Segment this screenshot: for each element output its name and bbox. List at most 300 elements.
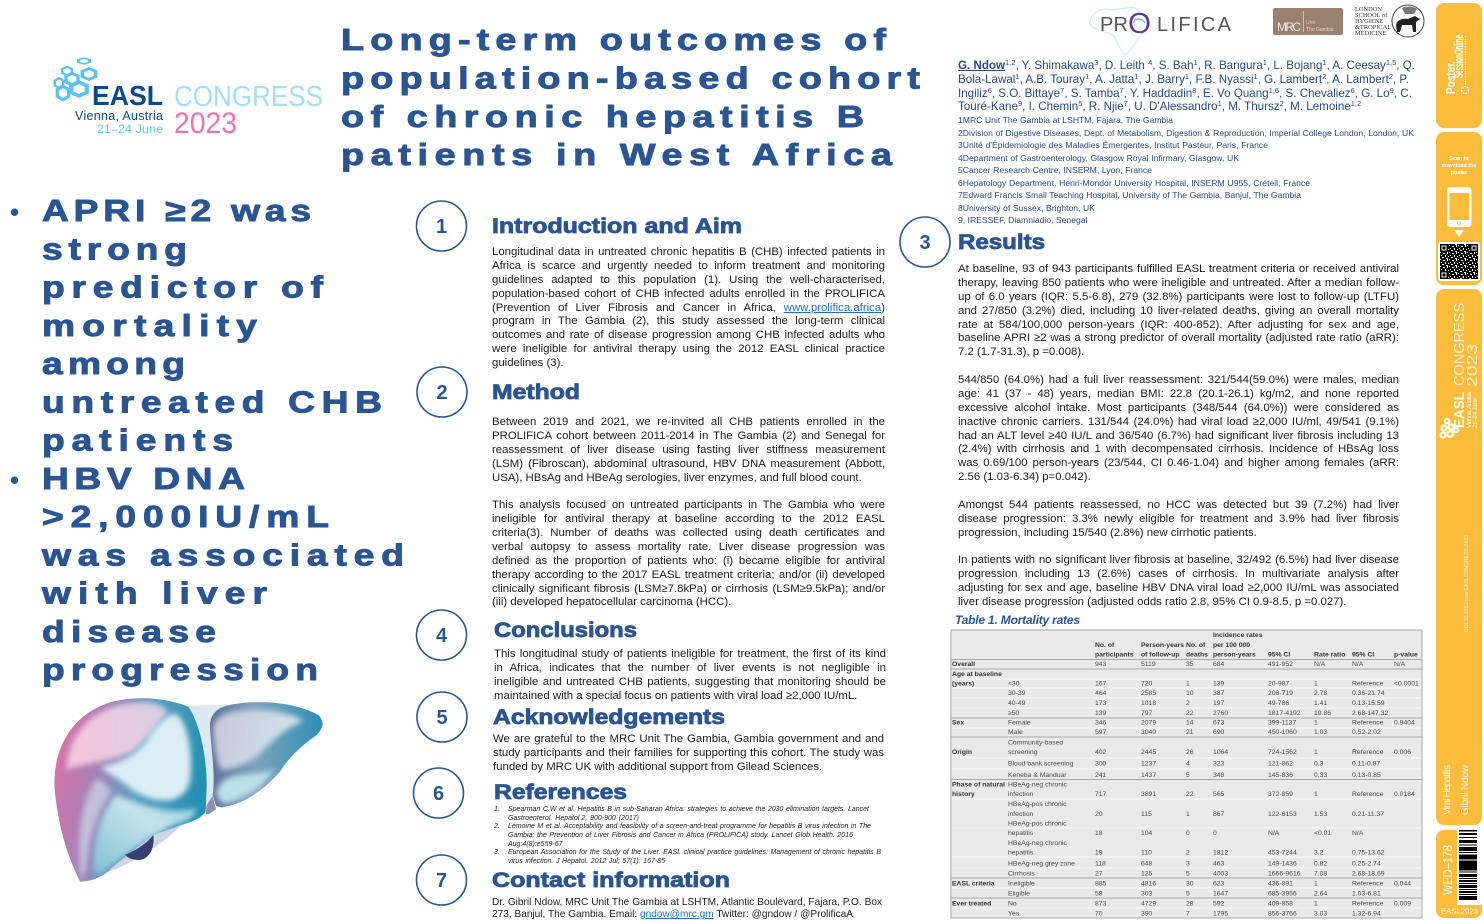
table: mortality rates: Female: [1008, 720, 1031, 726]
table: mortality rates: 104: [1141, 830, 1153, 837]
table: mortality rates: Phase of natural: [952, 782, 1005, 788]
key messages: >2,000IU/mL: [42, 500, 329, 534]
table: mortality rates: 30-39: [1008, 690, 1026, 697]
key messages: among: [42, 347, 185, 381]
table: mortality rates: 390: [1141, 910, 1153, 918]
table: mortality rates: hepatitis: [1008, 830, 1034, 837]
table: mortality rates: <0.0001: [1394, 680, 1419, 688]
logo: LSHTM: LONDON: [1355, 6, 1382, 13]
table: mortality rates: deaths: [1186, 652, 1208, 658]
table: mortality rates: 139: [1095, 710, 1107, 717]
affiliations: 2Division of Digestive Diseases, Dept. of Metabolism, Digestion & Reproduction, Imperial College London, London, UK: [958, 128, 1414, 138]
table: mortality rates: 1817-4192: [1268, 710, 1301, 717]
table: mortality rates: N/A: [1352, 830, 1364, 837]
table: mortality rates: infection: [1008, 811, 1034, 818]
table: mortality rates: 4: [1186, 760, 1190, 768]
table: mortality rates: HBeAg-pos chronic: [1008, 820, 1067, 828]
illustration: liver: [54, 698, 323, 882]
text: results: 544/850 (64.0%) had a full liver reassessment: 321/544(59.0%) were males, median: [958, 374, 1399, 386]
affiliations: 5Cancer Research Centre, INSERM, Lyon, France: [958, 165, 1152, 175]
table: mortality rates: of follow-up: [1141, 652, 1180, 658]
table: mortality rates: 58: [1095, 890, 1103, 898]
table: mortality rates: 1.32-6.94: [1352, 910, 1381, 918]
key messages: APRI ≥2 was: [42, 194, 311, 228]
text: references: Aug;4(8):e559-67: [508, 841, 562, 848]
key messages: patients: [42, 424, 233, 458]
text: introduction and aim: Africa is scarce and urgently needed to inform treatment and monitoring: [492, 260, 885, 272]
table: mortality rates: Ineligible: [1008, 880, 1035, 888]
text: references: virus infection. J Hepatol. 2012 Jul; 57(1): 167-85: [508, 858, 665, 865]
text: references: Gastroenterol. Hepatol.2, 900-900 (2017): [508, 815, 639, 822]
text: results: 2.56 (1.03-6.34) p=0.042).: [958, 471, 1091, 483]
table: mortality rates: 1: [1186, 680, 1190, 688]
table: mortality rates: 1237: [1141, 760, 1156, 768]
table: mortality rates: 717: [1095, 791, 1107, 798]
heading: Contact information: Contact information: [492, 869, 730, 892]
table: mortality rates: 1795: [1213, 910, 1228, 918]
logo: EASL Congress 2023: 2023: [174, 107, 237, 140]
table: mortality rates: <30: [1008, 680, 1020, 688]
section number 4: [416, 610, 466, 660]
table: mortality rates: <0.01: [1314, 830, 1331, 837]
text: method: reassessment of liver disease using fasting liver stiffness measurement: [492, 444, 885, 456]
table: mortality rates: 4816: [1141, 880, 1156, 888]
table: mortality rates: Reference: [1352, 680, 1384, 688]
table: mortality rates: 1: [1314, 749, 1318, 756]
table: mortality rates: 3.2: [1314, 850, 1324, 856]
side panel: poster number and barcode: WED–178: [1440, 845, 1455, 895]
table: mortality rates: 648: [1141, 860, 1153, 868]
table: mortality rates: 0.36-21.74: [1352, 690, 1385, 697]
table: mortality rates: 0.25-2.74: [1352, 860, 1381, 868]
table: mortality rates: 2585: [1141, 690, 1156, 697]
text: results: At baseline, 93 of 943 participants fulfilled EASL treatment criteria or received antiviral: [958, 263, 1399, 275]
text: 3.: [494, 849, 500, 856]
section number 7: 7: [436, 870, 447, 892]
text: results: up of 6.0 years (IQR: 5.5-6.8), 279 (32.8%) participants were lost to follow-up (LTFU): [958, 291, 1399, 303]
text: contact information: Dr. Gibril Ndow, MRC Unit The Gambia at LSHTM, Atlantic Boulevard, Fajara, P.O. Box: [492, 896, 882, 908]
section number 4: 4: [436, 625, 448, 647]
title: [341, 23, 921, 172]
title: Long-term outcomes of: [341, 23, 887, 57]
text: acknowledgements: funded by MRC UK with additional support from Gilead Sciences.: [493, 761, 822, 773]
table: mortality rates: 20: [1095, 811, 1103, 818]
text: references: Lemoine M et al. Acceptability and feasibility of a screen-and-treat programme for hepatitis B virus infection in The: [508, 823, 871, 830]
table: mortality rates: 0: [1186, 830, 1190, 837]
table: mortality rates: 208-719: [1268, 690, 1293, 697]
table: mortality rates: 22: [1186, 710, 1194, 717]
table: mortality rates: 20-987: [1268, 680, 1289, 688]
table: mortality rates: 856-3766: [1268, 910, 1297, 918]
text: method: (LSM) (Fibroscan), abdominal ultrasound, HBV DNA measurement (Abbott,: [492, 458, 885, 470]
table: mortality rates: 2: [1186, 850, 1190, 856]
text: acknowledgements: study participants and their families for supporting this cohort. The study was: [493, 747, 884, 759]
heading: Acknowledgements: Acknowledgements: [493, 706, 725, 729]
text: conclusions: in Africa, indicates that the number of liver events is not negligible in: [494, 662, 886, 674]
table: mortality rates: 491-952: [1268, 661, 1293, 668]
affiliations: [958, 115, 1414, 225]
key messages: with liver: [41, 577, 267, 611]
section number 3: [900, 217, 950, 267]
text: results: baseline APRI ≥2 was a strong predictor of overall mortality (adjusted rate ratio (aRR):: [958, 332, 1399, 344]
table: mortality rates: hepatitis: [1008, 850, 1034, 856]
table: mortality rates: HBeAg-neg chronic: [1008, 840, 1068, 847]
table: mortality rates: 300: [1095, 760, 1107, 768]
key messages: was associated: [41, 538, 404, 572]
text: method: therapy according to the 2017 EASL treatment criteria; and/or (ii) developed: [492, 569, 885, 581]
logo: LSHTM: HYGIENE: [1355, 18, 1383, 25]
table: mortality rates: 27: [1095, 870, 1103, 878]
table: mortality rates: HBeAg-neg grey zone: [1008, 860, 1075, 868]
table: mortality rates: 26: [1186, 749, 1194, 756]
text: method: Between 2019 and 2021, we re-invited all CHB patients enrolled in the: [492, 416, 885, 428]
side panel: EASL Congress session details: Gibril Ndow: [1460, 764, 1471, 815]
authors: Bola-Lawal1, A.B. Touray1, A. Jatta1, J. Barry1, F.B. Nyassi1, G. Lambert2, A. Lambert2, P.: [958, 72, 1409, 86]
text: references: Spearman C.W et al. Hepatitis B in sub-Saharan Africa: strategies to achieve the 2030 elimination targets. Lancet: [508, 806, 869, 813]
affiliations: 1MRC Unit The Gambia at LSHTM, Fajara, The Gambia: [958, 115, 1173, 125]
table: mortality rates: Cirrhosis: [1008, 870, 1035, 878]
affiliations: 9, IRESSEF, Diamniadio, Senegal: [958, 215, 1087, 225]
table: mortality rates: Age at baseline: [952, 671, 1002, 678]
table: mortality rates: 597: [1095, 729, 1107, 736]
table: mortality rates: Male: [1008, 729, 1023, 736]
table: mortality rates: 464: [1095, 690, 1107, 697]
table: mortality rates: 2: [1186, 700, 1190, 707]
table: mortality rates: Incidence rates: [1213, 632, 1263, 639]
table: mortality rates: 387: [1213, 690, 1225, 697]
table: mortality rates: 867: [1213, 811, 1225, 818]
table: mortality rates: 2.64: [1314, 890, 1327, 898]
affiliations: 7Edward Francis Small Teaching Hospital, University of The Gambia, Banjul, The Gambia: [958, 190, 1301, 200]
authors: Touré-Kane9, I. Chemin5, R. Njie7, U. D'Alessandro1, M. Thursz2, M. Lemoine1,2: [958, 99, 1361, 113]
side panel: EASL Congress session details: EASL: [1451, 392, 1468, 428]
table: mortality rates: Ever treated: [952, 900, 991, 908]
table: mortality rates: 0.044: [1394, 880, 1411, 888]
table: mortality rates: 453-7244: [1268, 850, 1297, 856]
side panel: Poster Session Online: [1436, 3, 1482, 128]
table: mortality rates: 1: [1314, 880, 1318, 888]
side panel: scan to download: download the: [1442, 163, 1476, 169]
table: mortality rates: 19.86: [1314, 710, 1331, 717]
heading: References: References: [494, 781, 627, 804]
text: results: and 27/850 (3.2%) died, including 10 liver-related deaths, giving an overall mortality: [958, 305, 1399, 317]
table: mortality rates: 1: [1314, 720, 1318, 726]
table: mortality rates: 409-858: [1268, 900, 1293, 908]
table: mortality rates: N/A: [1352, 661, 1364, 668]
heading: Introduction and Aim: Introduction and Aim: [492, 215, 742, 238]
text: method: defined as the proportion of patients who: (i) became eligible for antiviral: [492, 555, 885, 567]
table: mortality rates: N/A: [1314, 661, 1326, 668]
table: mortality rates: 5119: [1141, 661, 1156, 668]
authors: G. Ndow1,2, Y. Shimakawa3, D. Leith 4, S. Bah1, R. Bangura1, L. Bojang1, A. Ceesay1,5, Q.: [958, 58, 1415, 72]
table: mortality rates: 5: [1186, 870, 1190, 878]
side panel: EASL Congress session details: 21–24 June: [1473, 397, 1479, 428]
table: mortality rates: 7.08: [1314, 870, 1327, 878]
logo: EASL Congress 2023: Vienna, Austria: [75, 109, 163, 123]
side panel: EASL Congress session details: 2023: [1464, 344, 1481, 387]
text: results: liver disease progression (adjusted odds ratio 2.8, 95% CI 0.9-8.5, p =0.027).: [958, 596, 1346, 608]
logo: LSHTM: MEDICINE: [1355, 30, 1386, 37]
section number 6: 6: [433, 783, 444, 805]
table: mortality rates: 3: [1186, 860, 1190, 868]
table: mortality rates: 1: [1314, 900, 1318, 908]
logo: MRC Unit The Gambia: [1273, 8, 1343, 35]
table: mortality rates: 943: [1095, 661, 1107, 668]
section number 2: [417, 367, 467, 417]
table: mortality rates: Keneba & Manduar: [1008, 772, 1067, 779]
table: mortality rates: 372-859: [1268, 791, 1293, 798]
side panel: scan to download: Scan to: [1449, 156, 1469, 162]
text: 2.: [494, 823, 500, 830]
section number 5: [417, 692, 467, 742]
key messages: progression: [42, 653, 318, 687]
text: method: USA), HBsAg and HBeAg serologies, liver enzymes, and full blood count.: [492, 472, 862, 484]
logo: MRC Unit The Gambia: Unit: [1306, 20, 1316, 26]
table: mortality rates: 110: [1141, 850, 1152, 856]
side panel: EASL Congress session details: DOI:10.3252/pow.EASLCONGRESS.2023: [1464, 535, 1470, 632]
table: mortality rates: 1.41: [1314, 700, 1327, 707]
table: mortality rates: 450-1060: [1268, 729, 1297, 736]
table: mortality rates: 323: [1213, 760, 1225, 768]
QR code: [1438, 242, 1480, 281]
logo: EASL Congress 2023: EASL: [92, 80, 163, 111]
table: mortality rates: 125: [1141, 870, 1153, 878]
key messages: predictor of: [42, 271, 324, 305]
table: mortality rates: 0.9404: [1394, 720, 1415, 726]
table: mortality rates: 565: [1213, 791, 1225, 798]
table: mortality rates: 28: [1186, 900, 1194, 908]
table: mortality rates: per 100 000: [1213, 642, 1250, 649]
side panel: Poster Session Online: Poster: [1443, 63, 1458, 94]
table: mortality rates: Reference: [1352, 720, 1384, 726]
table: mortality rates: 1666-9616: [1268, 870, 1301, 878]
table: mortality rates: 40-49: [1008, 700, 1026, 707]
table: mortality rates: 592: [1213, 900, 1225, 908]
table: mortality rates: 873: [1095, 900, 1107, 908]
authors: [958, 58, 1415, 113]
table: mortality rates: No. of: [1186, 642, 1206, 649]
side panel: poster number and barcode: [1436, 830, 1482, 918]
text: method: criteria(3). Number of deaths was collected using death certificates and: [492, 527, 885, 539]
text: results: Amongst 544 patients reassessed, no HCC was detected but 39 (7.2%) had liver: [958, 499, 1399, 511]
text: results: had an ALT level ≥40 IU/L and 36/540 (6.7%) had significant liver fibrosis including 13: [958, 430, 1399, 442]
table: mortality rates: Blood bank screening: [1008, 760, 1074, 768]
table: mortality rates: 1: [1186, 811, 1190, 818]
table: mortality rates: Reference: [1352, 900, 1384, 908]
section number 3: 3: [919, 232, 931, 254]
table: mortality rates: Yes: [1008, 910, 1020, 918]
table: mortality rates: participants: [1095, 652, 1134, 658]
text: results: progression, including 15/540 (2.8%) new cirrhotic patients.: [958, 527, 1257, 539]
text: results: age: 41 (37 - 48) years, median BMI: 22.8 (20.1-26.1) kg/m2, and none reported: [958, 388, 1399, 400]
key messages: HBV DNA: [42, 462, 245, 496]
icon: phone: [1447, 187, 1472, 227]
text: conclusions: ineligible and untreated CHB patients, suggesting that monitoring should be: [494, 676, 886, 688]
table: mortality rates: 2079: [1141, 720, 1156, 726]
table: mortality rates: 0.13-15.59: [1352, 700, 1385, 707]
title: population-based cohort: [341, 62, 921, 96]
table: mortality rates: Person-years: [1141, 642, 1184, 649]
table: mortality rates: screening: [1008, 749, 1038, 756]
text: results: inactive chronic carriers. 131/544 (24.0%) had viral load ≥2,000 IU/ml, 49/541 (9.1%): [958, 416, 1399, 428]
text: introduction and aim: Longitudinal data in untreated chronic hepatitis B (CHB) infected patients in: [492, 246, 885, 258]
table: mortality rates: 623: [1213, 880, 1225, 888]
key messages: strong: [42, 232, 187, 266]
table: mortality rates: 122-6153: [1268, 811, 1297, 818]
text: acknowledgements: [493, 733, 884, 773]
table: mortality rates: 95% CI: [1352, 652, 1374, 658]
table: mortality rates: Community-based: [1008, 740, 1063, 746]
table: mortality rates: 18: [1095, 830, 1103, 837]
table: mortality rates: 797: [1141, 710, 1153, 717]
table: mortality rates: 303: [1141, 890, 1153, 898]
side panel: EASL Congress session details: CONGRESS: [1451, 303, 1468, 386]
table: mortality rates: 95% CI: [1268, 652, 1290, 658]
heading: Results: Results: [958, 230, 1045, 254]
table: mortality rates: 0.006: [1394, 749, 1411, 756]
heading: Method: Method: [492, 381, 580, 404]
key messages: •: [10, 465, 19, 495]
text: acknowledgements: We are grateful to the MRC Unit The Gambia, Gambia government and and: [493, 733, 884, 745]
table: mortality rates: 167: [1095, 680, 1107, 688]
table: mortality rates: p-value: [1394, 652, 1418, 658]
logo: PROLIFICA: O: [1128, 8, 1151, 40]
text: references: [494, 806, 881, 865]
table: mortality rates: 1812: [1213, 850, 1228, 856]
table: mortality rates: person-years: [1213, 652, 1256, 658]
icon: arrow down: [1454, 230, 1464, 237]
text: results: disease progression: 3.3% newly eligible for treatment and 3.9% had liver fibrosis: [958, 513, 1399, 525]
table: mortality rates: 346: [1095, 720, 1107, 726]
text: introduction and aim: guidelines adapted to this population (1). Using the well-characterised,: [492, 274, 885, 286]
table title: Table 1. Mortality rates: [955, 613, 1080, 627]
logo: PROLIFICA: LIFICA: [1157, 14, 1232, 36]
text: introduction and aim: were ineligible for antiviral therapy using the 2012 EASL clinical practice: [492, 343, 885, 355]
side panel: poster number and barcode: EASL2023: [1441, 906, 1478, 916]
text: conclusions: This longitudinal study of patients ineligible for treatment, the first of its kind: [494, 648, 886, 660]
table: mortality rates: 118: [1095, 860, 1106, 868]
table: mortality rates: [951, 630, 1422, 918]
table: mortality rates: Reference: [1352, 791, 1384, 798]
table: mortality rates: 463: [1213, 860, 1225, 868]
table: mortality rates: 673: [1213, 720, 1225, 726]
text: contact information: 273, Banjul, The Gambia. Email: gndow@mrc.gm Twitter: @gndow / @ProlificaA: [492, 909, 853, 920]
table: mortality rates: 2.68-147.32: [1352, 710, 1389, 717]
title: of chronic hepatitis B: [341, 100, 864, 134]
table: mortality rates: 4729: [1141, 900, 1156, 908]
table: mortality rates: 35: [1186, 661, 1194, 668]
table: mortality rates: 5: [1186, 890, 1190, 898]
text: results: (2.4%) with cirrhosis and 1 with decompensated cirrhosis. Incidence of HBsAg loss: [958, 443, 1399, 455]
table: mortality rates: 3040: [1141, 729, 1156, 736]
table: mortality rates: 1018: [1141, 700, 1156, 707]
logo: EASL Congress 2023: CONGRESS: [174, 81, 323, 113]
table: mortality rates: Eligible: [1008, 890, 1030, 898]
section number 1: [416, 201, 466, 251]
text: results: adjusting for sex and age, baseline HBV DNA viral load ≥2,000 IU/mL was associated: [958, 582, 1399, 594]
table: mortality rates: history: [952, 791, 975, 798]
table: mortality rates: 139: [1213, 680, 1225, 688]
table: mortality rates: 3.03: [1314, 910, 1327, 918]
table: mortality rates: 5: [1186, 772, 1190, 779]
text: references: European Association for the Study of the Liver. EASL clinical practice guidelines: Management of chronic hepatitis B: [508, 849, 881, 856]
table: mortality rates: 724-1562: [1268, 749, 1297, 756]
table: mortality rates: infection: [1008, 791, 1034, 798]
table: mortality rates: Reference: [1352, 749, 1384, 756]
table: mortality rates: 720: [1141, 680, 1153, 688]
table: mortality rates: 30: [1186, 880, 1194, 888]
section number 5: 5: [436, 707, 448, 729]
table: mortality rates: 1.53: [1314, 811, 1327, 818]
table: mortality rates: 1: [1314, 680, 1318, 688]
affiliations: 3Unité d'Épidemiologie des Maladies Émergentes, Institut Pasteur, Paris, France: [958, 140, 1268, 150]
logo: EASL Congress 2023: 21–24 June: [97, 122, 163, 136]
table: mortality rates: 4003: [1213, 870, 1228, 878]
section number 1: 1: [436, 216, 447, 238]
table: mortality rates: HBeAg-pos chronic: [1008, 801, 1067, 808]
table: mortality rates: 2.78: [1314, 690, 1327, 697]
table: mortality rates: Sex: [952, 720, 964, 726]
table: mortality rates: 0.3: [1314, 760, 1324, 768]
side panel: scan to download: poster: [1451, 170, 1468, 176]
table: mortality rates: N/A: [1268, 830, 1280, 837]
text: results: 7.2 (1.7-31.3), p =0.008).: [958, 346, 1084, 358]
side panel: EASL Congress session details: Viral Hepatitis: [1442, 765, 1453, 815]
table: mortality rates: 2.68-18.69: [1352, 870, 1385, 878]
table: mortality rates: 0.0184: [1394, 791, 1415, 798]
section number 6: [414, 768, 464, 818]
table: mortality rates: Rate ratio: [1314, 652, 1345, 658]
text: method: (iii) developed hepatocellular carcinoma (HCC).: [492, 596, 731, 608]
table: mortality rates: 685-3956: [1268, 890, 1297, 898]
table: mortality rates: 2445: [1141, 749, 1156, 756]
table: mortality rates: 14: [1186, 720, 1194, 726]
text: conclusions: maintained with a special focus on patients with viral load ≥2,000 IU/mL.: [494, 690, 857, 702]
table: mortality rates: 0.75-13.62: [1352, 850, 1385, 856]
logo: LSHTM: [1355, 5, 1424, 37]
heading: Conclusions: Conclusions: [494, 619, 637, 642]
text: results: In patients with no significant liver fibrosis at baseline, 32/492 (6.5%) had liver disease: [958, 554, 1399, 566]
text: method: [492, 416, 885, 608]
logo: LSHTM: SCHOOL of: [1355, 12, 1388, 19]
table: mortality rates: 348: [1213, 772, 1225, 779]
logo: PROLIFICA: PR: [1100, 14, 1128, 36]
side panel: EASL Congress session details: Vienna, Austria: [1466, 392, 1473, 428]
affiliations: 6Hepatology Department, Henri-Mondor University Hospital, INSERM U955, Créteil, France: [958, 178, 1310, 188]
logo: MRC Unit The Gambia: MRC: [1277, 20, 1301, 34]
authors: Ingiliz6, S.O. Bittaye7, S. Tamba7, Y. Haddadin8, E. Vo Quang1,6, S. Chevaliez6, G. Lo9, C.: [958, 86, 1412, 100]
key messages: mortality: [42, 309, 257, 343]
table: mortality rates: 0.33: [1314, 772, 1327, 779]
text: method: ineligible for antiviral therapy at baseline according to the 2012 EASL: [492, 513, 885, 525]
table: mortality rates: Reference: [1352, 880, 1384, 888]
text: results: excessive alcohol intake. Most participants (348/544 (64.0%)) were considered as: [958, 402, 1399, 414]
affiliations: 4Department of Gastroenterology, Glasgow Royal Infirmary, Glasgow, UK: [958, 152, 1239, 162]
text: results: rate at 584/100,000 person-years (IQR: 400-852). After adjusting for sex and age,: [958, 318, 1399, 330]
table: mortality rates: 145-836: [1268, 772, 1293, 779]
text: results: was 0.69/100 person-years (23/544, CI 0.46-1.04) and higher among females (aRR:: [958, 457, 1399, 469]
table: mortality rates: HBeAg-neg chronic: [1008, 782, 1068, 788]
text: method: This analysis focused on untreated participants in The Gambia who were: [492, 499, 885, 511]
table: mortality rates: Overall: [952, 661, 975, 668]
text: introduction and aim: [492, 246, 885, 369]
text: introduction and aim: population-based cohort of CHB infected adults enrolled in the PROLIFICA: [492, 288, 885, 300]
table: mortality rates: 2760: [1213, 710, 1228, 717]
table: mortality rates: EASL criteria: [952, 880, 995, 888]
table: mortality rates: 1437: [1141, 772, 1156, 779]
logo: EASL Congress 2023: [55, 58, 323, 140]
table: mortality rates: 1.03-6.81: [1352, 890, 1381, 898]
